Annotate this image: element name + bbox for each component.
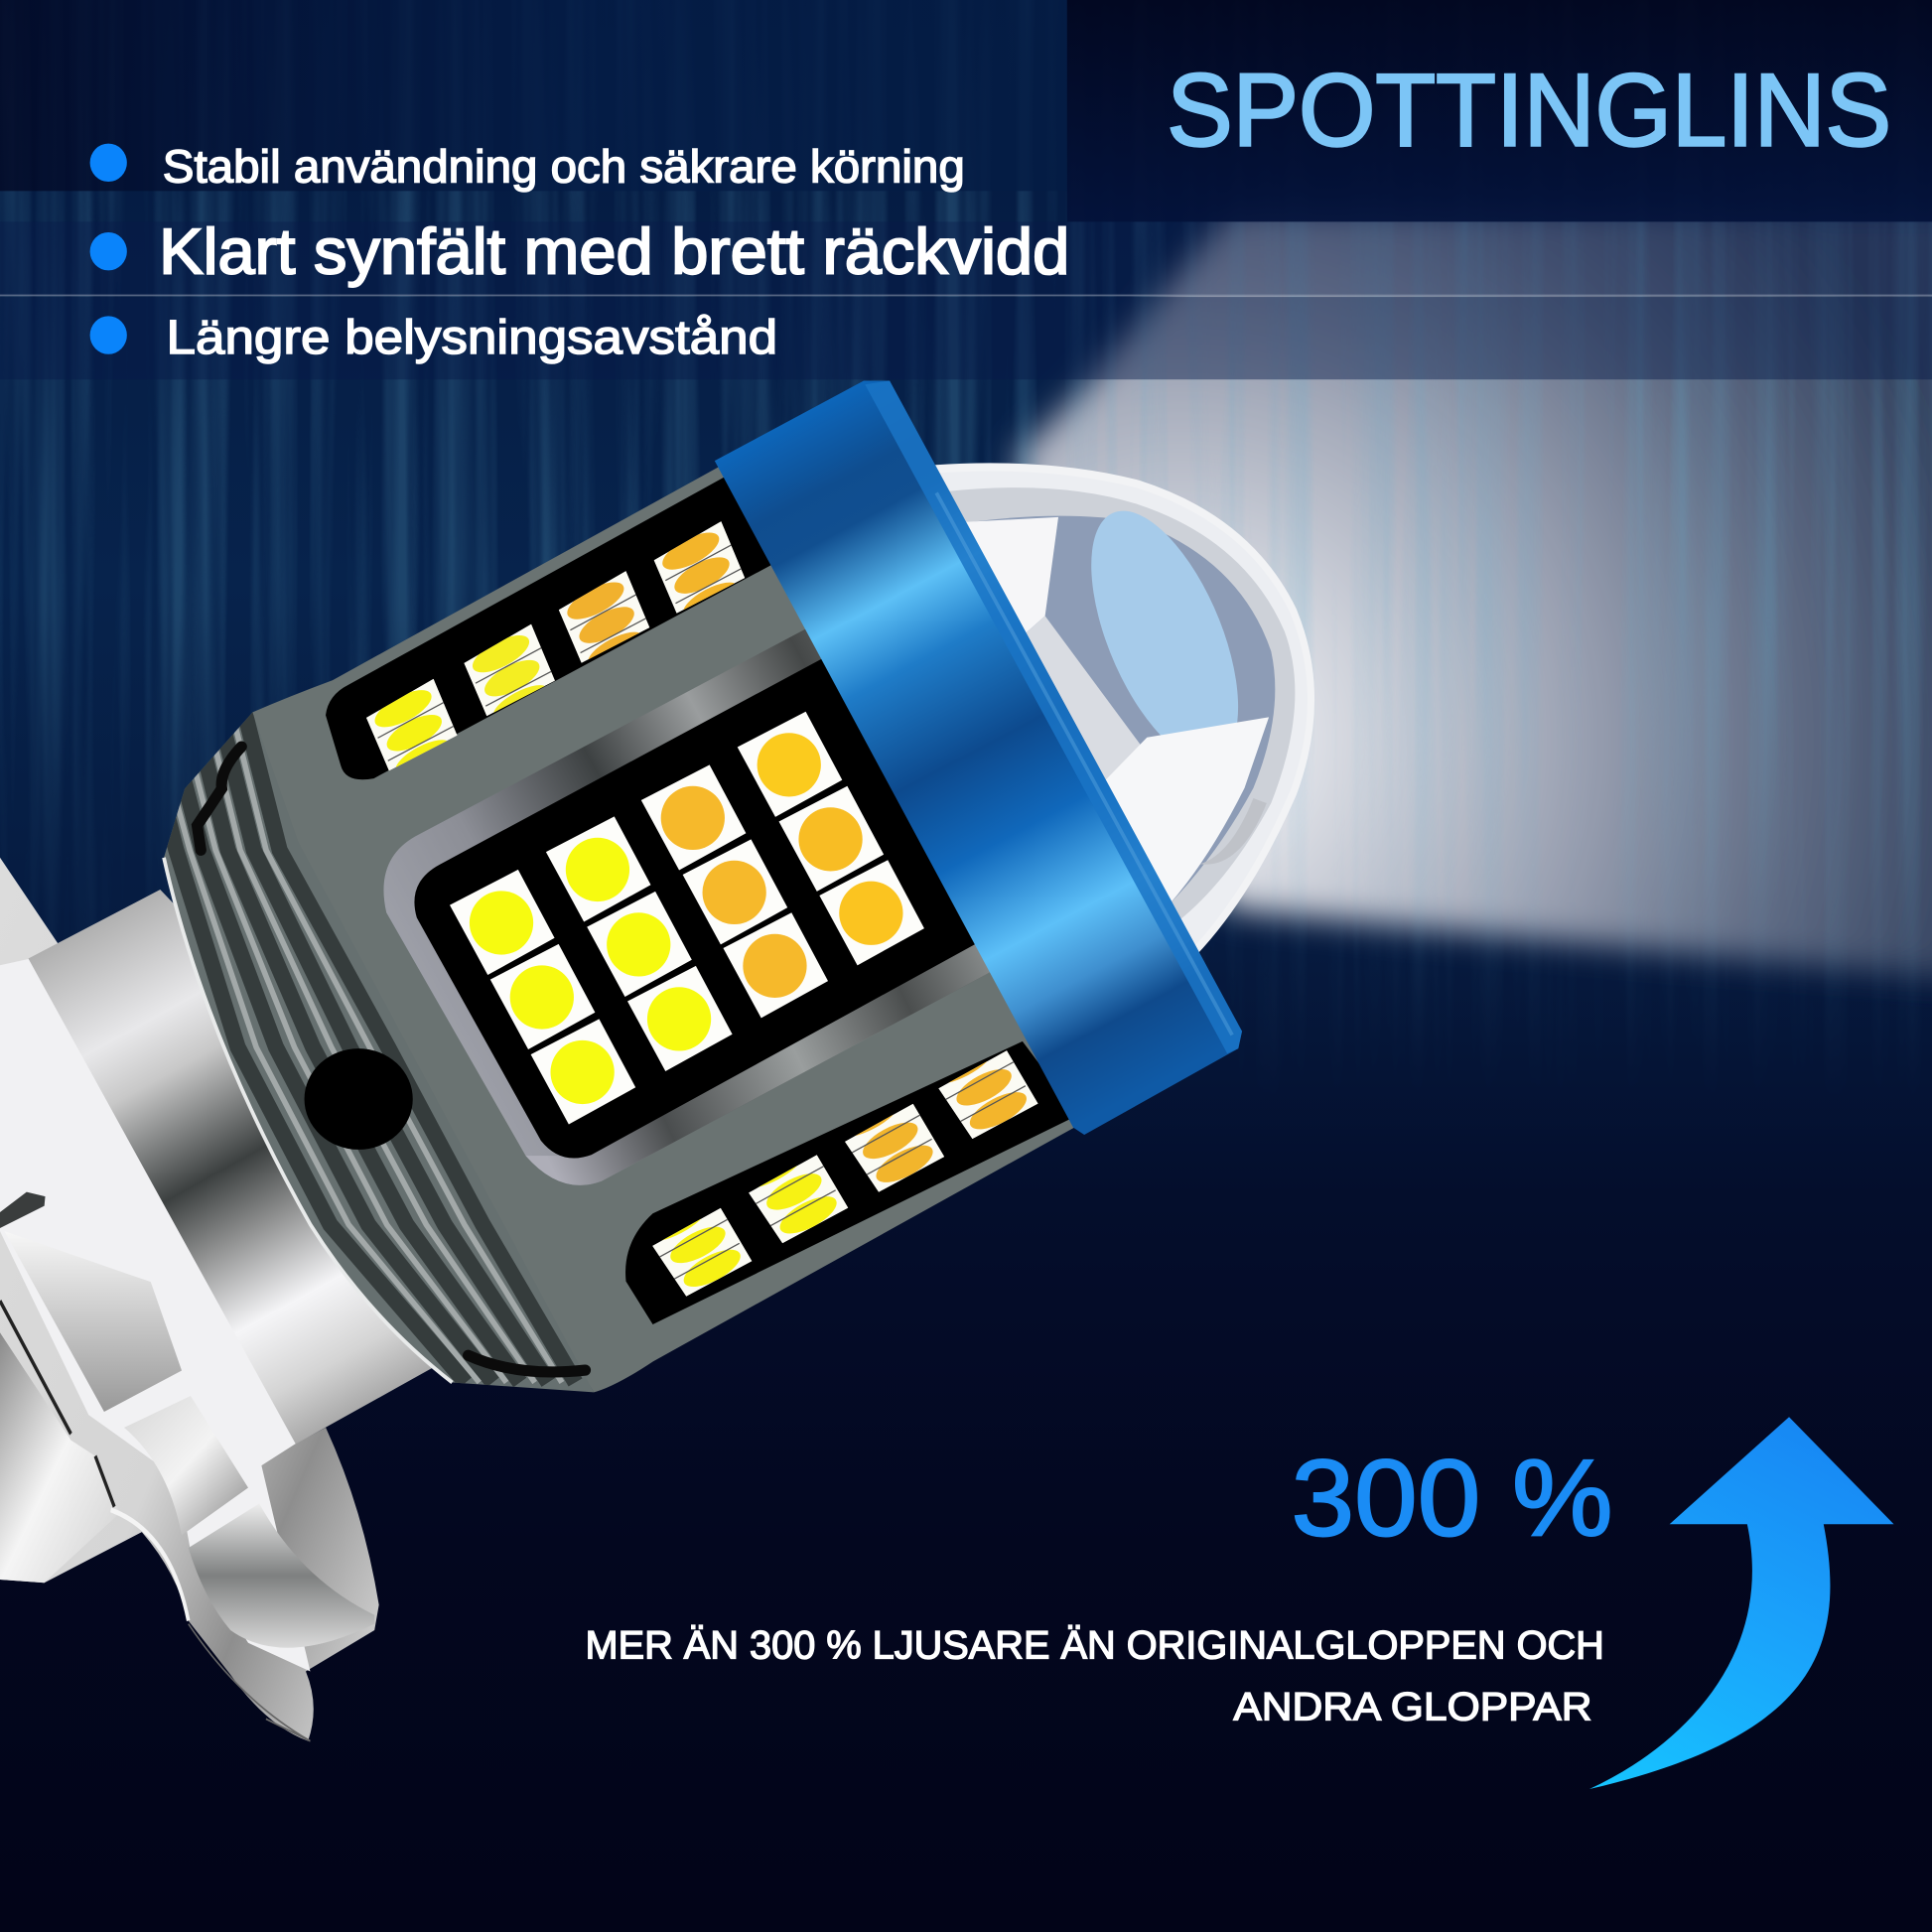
main LED panel and upper strip — [326, 473, 1077, 1324]
caption — [586, 1623, 1604, 1729]
grooved collar — [148, 690, 594, 1392]
panel rim — [383, 619, 1007, 1185]
bullet 1: Stabil användning och säkrare körning — [163, 141, 965, 193]
bullet list — [90, 141, 1069, 364]
light beam — [1017, 209, 1932, 980]
bulb base flange — [0, 858, 379, 1741]
panel: band behind third bullet — [0, 297, 1932, 379]
bullet 3: Längre belysningsavstånd — [167, 311, 777, 364]
seam marks — [198, 747, 586, 1372]
panel: top-left header — [0, 0, 1067, 191]
silver cylinder — [29, 890, 446, 1445]
300 percent figure: 300 % — [1292, 1438, 1613, 1559]
LED array — [450, 712, 924, 1124]
black screw dot — [305, 1048, 413, 1150]
bullet 2: Klart synfält med brett räckvidd — [159, 216, 1069, 288]
lens — [934, 467, 1311, 953]
background light streaks — [0, 191, 1932, 965]
blue ring — [715, 380, 1242, 1135]
panel: title background — [1067, 0, 1932, 221]
gray housing — [234, 466, 1074, 1392]
panel: band behind second bullet — [0, 221, 1932, 296]
divider line — [0, 295, 1932, 296]
lower LED strip — [625, 1041, 1077, 1324]
main LED panel — [414, 652, 987, 1159]
arrow: rising — [1589, 1417, 1894, 1789]
upper LED strip — [326, 473, 784, 781]
title: SPOTTINGLINS — [1167, 53, 1891, 168]
caption: ANDRA GLOPPAR — [1233, 1686, 1591, 1729]
caption: MER ÄN 300 % LJUSARE ÄN ORIGINALGLOPPEN OCH — [586, 1623, 1604, 1667]
bulb illustration — [0, 380, 1311, 1741]
